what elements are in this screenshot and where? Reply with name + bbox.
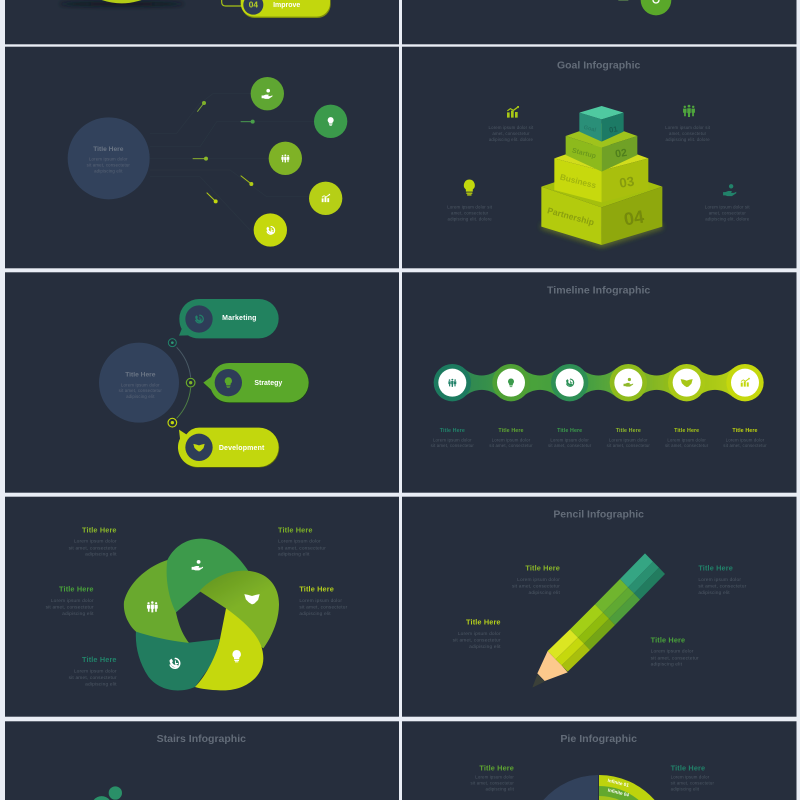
step 2: sit amet, consectetur bbox=[489, 443, 533, 448]
icon: bulb bbox=[464, 180, 475, 196]
step 3: sit amet, consectetur bbox=[548, 443, 592, 448]
left label: Title Here bbox=[479, 763, 514, 772]
heading: Pie Infographic bbox=[560, 734, 637, 745]
label middle right: Title Here bbox=[299, 585, 334, 594]
right label: Lorem ipsum dolor bbox=[671, 775, 710, 780]
pyramid tier 03: 03 bbox=[618, 174, 635, 191]
icon: phone bbox=[169, 658, 181, 669]
pyramid tier 02 bbox=[566, 123, 637, 172]
label top left: adipiscing elit bbox=[85, 552, 117, 558]
label upper left: sit amet, consectetur bbox=[512, 584, 560, 590]
label top left bbox=[69, 525, 117, 558]
label lower left bbox=[453, 618, 501, 650]
central circle: Title Here bbox=[125, 372, 156, 379]
step 4: Lorem ipsum dolor bbox=[609, 437, 648, 442]
panel: goal infographic bbox=[402, 47, 796, 268]
step 2: Lorem ipsum dolor bbox=[492, 437, 531, 442]
label lower right: sit amet, consectetur bbox=[651, 655, 699, 661]
label top right: Lorem ipsum dolor bbox=[278, 539, 321, 545]
label middle left: Lorem ipsum dolor bbox=[51, 598, 94, 604]
label bottom left: Lorem ipsum dolor bbox=[74, 668, 117, 674]
text block: upper right: adipiscing elit. dolore bbox=[666, 137, 710, 142]
central circle: sit amet, consectetur bbox=[119, 388, 162, 393]
step 5: sit amet, consectetur bbox=[665, 443, 709, 448]
text block: upper left: Lorem ipsum dolor sit bbox=[489, 125, 534, 130]
central circle: adipiscing elit bbox=[126, 394, 155, 399]
step 1: sit amet, consectetur bbox=[431, 443, 474, 448]
label middle right: sit amet, consectetur bbox=[299, 605, 348, 611]
label middle right bbox=[299, 585, 348, 617]
step 2: Title Here bbox=[498, 428, 524, 434]
step 1: Title Here bbox=[440, 428, 465, 434]
pyramid tier 04: 04 bbox=[622, 207, 645, 229]
text block: upper left: adipiscing elit. dolore bbox=[489, 137, 534, 142]
central circle: Title Here bbox=[93, 146, 124, 153]
label middle right: adipiscing elit bbox=[299, 611, 331, 617]
pie slice navy bbox=[543, 775, 598, 800]
text block: lower right bbox=[705, 205, 750, 222]
panel: pencil infographic bbox=[402, 497, 796, 717]
text block: upper right: Lorem ipsum dolor sit bbox=[665, 125, 711, 130]
label lower left: adipiscing elit bbox=[469, 644, 501, 650]
label lower right: Title Here bbox=[651, 635, 685, 644]
label bottom left: Title Here bbox=[82, 655, 117, 664]
text block: lower left: Lorem ipsum dolor sit bbox=[447, 205, 493, 210]
panel: five part cycle bbox=[5, 497, 399, 717]
label upper right bbox=[698, 564, 747, 596]
icon circle: bulb bbox=[314, 105, 347, 138]
label top left: sit amet, consectetur bbox=[69, 545, 117, 551]
pill: 04 Improve bbox=[241, 0, 331, 18]
central circle: Lorem ipsum dolor bbox=[89, 157, 128, 162]
icon: cut-off green circle bbox=[618, 0, 671, 15]
label top right: adipiscing elit bbox=[278, 552, 310, 558]
text block: lower left: adipiscing elit. dolore bbox=[448, 217, 492, 222]
icon: hand bbox=[192, 560, 203, 570]
central circle: adipiscing elit bbox=[94, 169, 123, 174]
central circle bbox=[99, 343, 179, 423]
right label: Title Here bbox=[671, 763, 705, 772]
pencil bbox=[532, 553, 665, 688]
text block: lower right: Lorem ipsum dolor sit bbox=[705, 205, 750, 210]
shadow and base of cut-off disc bbox=[60, 0, 183, 6]
label middle left bbox=[46, 585, 94, 617]
heading: Pencil Infographic bbox=[553, 510, 644, 521]
text block: lower left bbox=[447, 205, 493, 222]
panel: stairs infographic bbox=[5, 721, 399, 800]
right label: adipiscing elit bbox=[671, 787, 700, 792]
central circle bbox=[68, 117, 150, 199]
step 3 bbox=[548, 364, 592, 448]
right label: sit amet, consectetur bbox=[671, 781, 714, 786]
pie chart bbox=[543, 775, 655, 800]
label bottom left: adipiscing elit bbox=[85, 681, 117, 687]
label upper left bbox=[512, 564, 560, 596]
pencil section lime bbox=[570, 604, 615, 650]
pencil section teal bbox=[620, 553, 665, 600]
panel: speech bubble branches bbox=[5, 272, 399, 493]
heading: Goal Infographic bbox=[557, 60, 641, 71]
text block: upper left: amet, consectetur bbox=[492, 131, 530, 136]
label bottom left: sit amet, consectetur bbox=[69, 675, 117, 681]
connector line bbox=[222, 0, 242, 6]
pie ring labels: Infinite 01 bbox=[607, 778, 630, 788]
text block: lower left: amet, consectetur bbox=[451, 211, 489, 216]
icon: hand bbox=[723, 184, 736, 196]
icon circle: phone bbox=[254, 213, 287, 247]
pie rings bbox=[599, 775, 655, 800]
bubble: Strategy: Strategy bbox=[254, 380, 282, 387]
step 5: Lorem ipsum dolor bbox=[667, 437, 706, 442]
pie ring labels: Infinite 04 bbox=[607, 787, 630, 798]
icon circle: people bbox=[269, 142, 302, 175]
pyramid tier 01 cube: 01 bbox=[608, 124, 619, 135]
step 5 bbox=[665, 364, 709, 448]
label lower left: Title Here bbox=[466, 618, 501, 627]
needles bbox=[193, 101, 255, 203]
step 4: sit amet, consectetur bbox=[607, 443, 650, 448]
label lower right bbox=[651, 635, 699, 668]
node lime bbox=[168, 418, 177, 427]
icon: people bbox=[683, 105, 695, 117]
label top right: Title Here bbox=[278, 525, 313, 534]
label top right: sit amet, consectetur bbox=[278, 545, 326, 551]
icon circle: chart bbox=[309, 182, 342, 215]
heading: Stairs Infographic bbox=[157, 734, 246, 745]
petal: bottom right lime bbox=[195, 608, 263, 690]
step 2 bbox=[489, 364, 533, 448]
label upper right: sit amet, consectetur bbox=[698, 584, 747, 590]
label upper right: Title Here bbox=[698, 564, 733, 573]
step 5: Title Here bbox=[674, 428, 699, 434]
stair figure bbox=[94, 786, 122, 800]
node teal bbox=[168, 339, 176, 347]
pill: 04 Improve: Improve bbox=[273, 2, 300, 9]
pie ring labels bbox=[607, 778, 630, 798]
label upper right: adipiscing elit bbox=[698, 590, 730, 596]
petal: top green bbox=[167, 539, 248, 612]
petal: bottom left teal bbox=[136, 631, 220, 690]
text block: upper right: amet, consectetur bbox=[669, 131, 707, 136]
pyramid tier 03 bbox=[554, 142, 648, 202]
pyramid tier 02: 02 bbox=[614, 147, 628, 161]
label top left: Title Here bbox=[82, 525, 117, 534]
left label: adipiscing elit bbox=[486, 787, 515, 792]
step 6: Lorem ipsum dolor bbox=[726, 437, 765, 442]
panel: radial needles bbox=[5, 47, 399, 268]
label lower left: Lorem ipsum dolor bbox=[458, 631, 501, 637]
label upper left: adipiscing elit bbox=[528, 590, 560, 596]
petal: left green bbox=[124, 560, 189, 643]
step 6: Title Here bbox=[732, 428, 758, 434]
label top left: Lorem ipsum dolor bbox=[74, 539, 117, 545]
pyramid tier 03: Business bbox=[559, 172, 598, 190]
icon: bulb bbox=[232, 650, 241, 662]
arc connector bbox=[177, 347, 191, 418]
heading: Timeline Infographic bbox=[547, 285, 651, 296]
bubble: Development bbox=[178, 428, 279, 468]
panel: top right fragment bbox=[402, 0, 796, 44]
step 3: Lorem ipsum dolor bbox=[550, 437, 589, 442]
pyramid tier 01 cube: Goal bbox=[583, 125, 597, 134]
panel: timeline infographic bbox=[402, 272, 796, 493]
label top right bbox=[278, 525, 326, 558]
label lower right: adipiscing elit bbox=[651, 662, 683, 668]
text block: lower right: adipiscing elit. dolore bbox=[705, 217, 750, 222]
step 3: Title Here bbox=[557, 428, 582, 434]
label upper left: Title Here bbox=[525, 564, 560, 573]
step 1: Lorem ipsum dolor bbox=[433, 437, 472, 442]
pyramid tier 04 bbox=[541, 167, 662, 245]
bubble: Marketing bbox=[179, 299, 279, 338]
icon: handshake bbox=[244, 594, 260, 604]
step 6: sit amet, consectetur bbox=[723, 443, 767, 448]
label bottom left bbox=[69, 655, 117, 687]
bubble: Development: Development bbox=[219, 445, 265, 452]
right label bbox=[671, 763, 714, 792]
icon: chart bbox=[507, 106, 519, 118]
central circle: sit amet, consectetur bbox=[87, 163, 130, 168]
left label: Lorem ipsum dolor bbox=[475, 775, 514, 780]
petal: right green bbox=[199, 571, 279, 648]
label upper left: Lorem ipsum dolor bbox=[517, 577, 560, 583]
bubble: Marketing: Marketing bbox=[222, 315, 257, 322]
left label: sit amet, consectetur bbox=[471, 781, 514, 786]
pyramid glow bbox=[541, 223, 662, 247]
label middle left: sit amet, consectetur bbox=[46, 605, 94, 611]
pyramid tier 02: Startup bbox=[571, 147, 597, 160]
label upper right: Lorem ipsum dolor bbox=[698, 577, 741, 583]
icon circle: hand bbox=[251, 77, 284, 110]
pyramid tier 04: Partnership bbox=[546, 205, 595, 227]
step 4: Title Here bbox=[616, 428, 641, 434]
pencil lead bbox=[532, 674, 545, 688]
text block: upper right bbox=[665, 125, 711, 142]
icon: people bbox=[147, 601, 158, 612]
text block: lower right: amet, consectetur bbox=[709, 211, 746, 216]
pyramid tier 01 cube bbox=[579, 106, 624, 142]
left label bbox=[471, 763, 515, 792]
label lower right: Lorem ipsum dolor bbox=[651, 649, 694, 655]
pencil section green bbox=[595, 579, 640, 625]
node green bbox=[186, 378, 195, 387]
pencil wood tip bbox=[537, 651, 568, 681]
central circle: Lorem ipsum dolor bbox=[121, 382, 160, 387]
pencil section yellow bbox=[548, 629, 590, 672]
label lower left: sit amet, consectetur bbox=[453, 638, 501, 644]
panel: pie infographic bbox=[402, 721, 796, 800]
bubble: Strategy bbox=[203, 363, 309, 403]
panel: top left process fragment bbox=[5, 0, 399, 44]
text block: upper left bbox=[489, 125, 534, 142]
label middle left: Title Here bbox=[59, 585, 94, 594]
label middle left: adipiscing elit bbox=[62, 611, 94, 617]
step 6 bbox=[723, 364, 767, 448]
label middle right: Lorem ipsum dolor bbox=[299, 598, 342, 604]
step 4 bbox=[607, 364, 650, 448]
faint connector lines bbox=[150, 93, 315, 230]
timeline band bbox=[463, 368, 733, 397]
step 1 bbox=[431, 364, 474, 448]
